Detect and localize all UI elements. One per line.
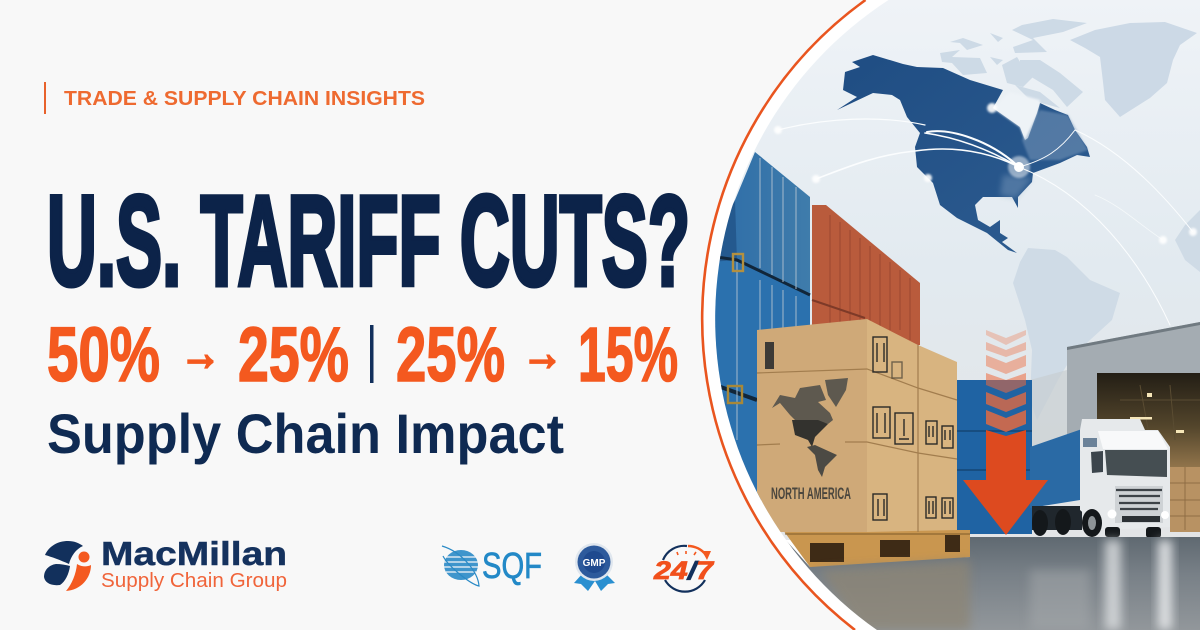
canadian glow	[1022, 110, 1088, 160]
route lines	[778, 119, 1193, 325]
tariff rates: 50%	[47, 312, 160, 398]
tariff rates: →	[180, 325, 221, 381]
orange arc	[702, 0, 866, 630]
tariff rates: 25%	[238, 312, 349, 398]
stacked containers right	[957, 380, 1032, 534]
grille	[1115, 486, 1163, 523]
tag line: TRADE & SUPPLY CHAIN INSIGHTS	[64, 88, 425, 110]
truck	[1030, 419, 1170, 538]
logo mark	[44, 541, 91, 591]
logo: MacMillan	[44, 535, 287, 592]
trailer	[1030, 429, 1082, 508]
badge: GMP: GMP	[583, 558, 606, 569]
arctic islands	[940, 19, 1087, 108]
southeast glow	[1000, 175, 1032, 198]
tariff down arrow	[963, 330, 1048, 535]
africa edge	[1175, 210, 1200, 272]
logo wordmark: MacMillan	[101, 535, 287, 572]
logo tagline: Supply Chain Group	[101, 570, 287, 592]
subtitle: Supply Chain Impact	[47, 402, 564, 465]
badge: 24/7: 24/7	[653, 557, 714, 585]
hudson bay	[993, 92, 1040, 140]
box caption: NORTH AMERICA	[771, 484, 851, 503]
greenland	[1070, 22, 1197, 117]
warehouse interior	[1097, 373, 1200, 467]
box faces	[757, 319, 867, 532]
badge: SQF: SQF	[482, 545, 542, 586]
white ring	[703, 0, 1200, 630]
north america	[837, 55, 1090, 253]
red container	[812, 205, 920, 345]
blue container stack	[710, 152, 810, 500]
badge: GMP	[574, 543, 615, 591]
tariff rates: 25%	[396, 312, 505, 398]
cardboard boxes with North America map	[757, 319, 970, 567]
tariff rates	[47, 312, 678, 398]
badge: 24/7	[653, 546, 714, 592]
tariff rates: →	[522, 325, 563, 381]
pallet	[783, 530, 970, 567]
wheels	[1082, 509, 1102, 537]
box label tab	[765, 342, 774, 369]
warehouse	[1030, 322, 1200, 532]
floor	[787, 532, 1200, 630]
fragile icons	[873, 337, 953, 520]
photo collage	[710, 0, 1200, 630]
cab	[1080, 419, 1170, 512]
glowing hubs	[774, 103, 1197, 244]
world map	[774, 19, 1200, 420]
windshield	[1105, 450, 1167, 477]
badge: SQF	[442, 545, 542, 586]
south america	[1013, 248, 1120, 380]
headlights	[1108, 510, 1116, 518]
tariff rates: 15%	[578, 312, 678, 398]
box map print	[772, 378, 848, 477]
